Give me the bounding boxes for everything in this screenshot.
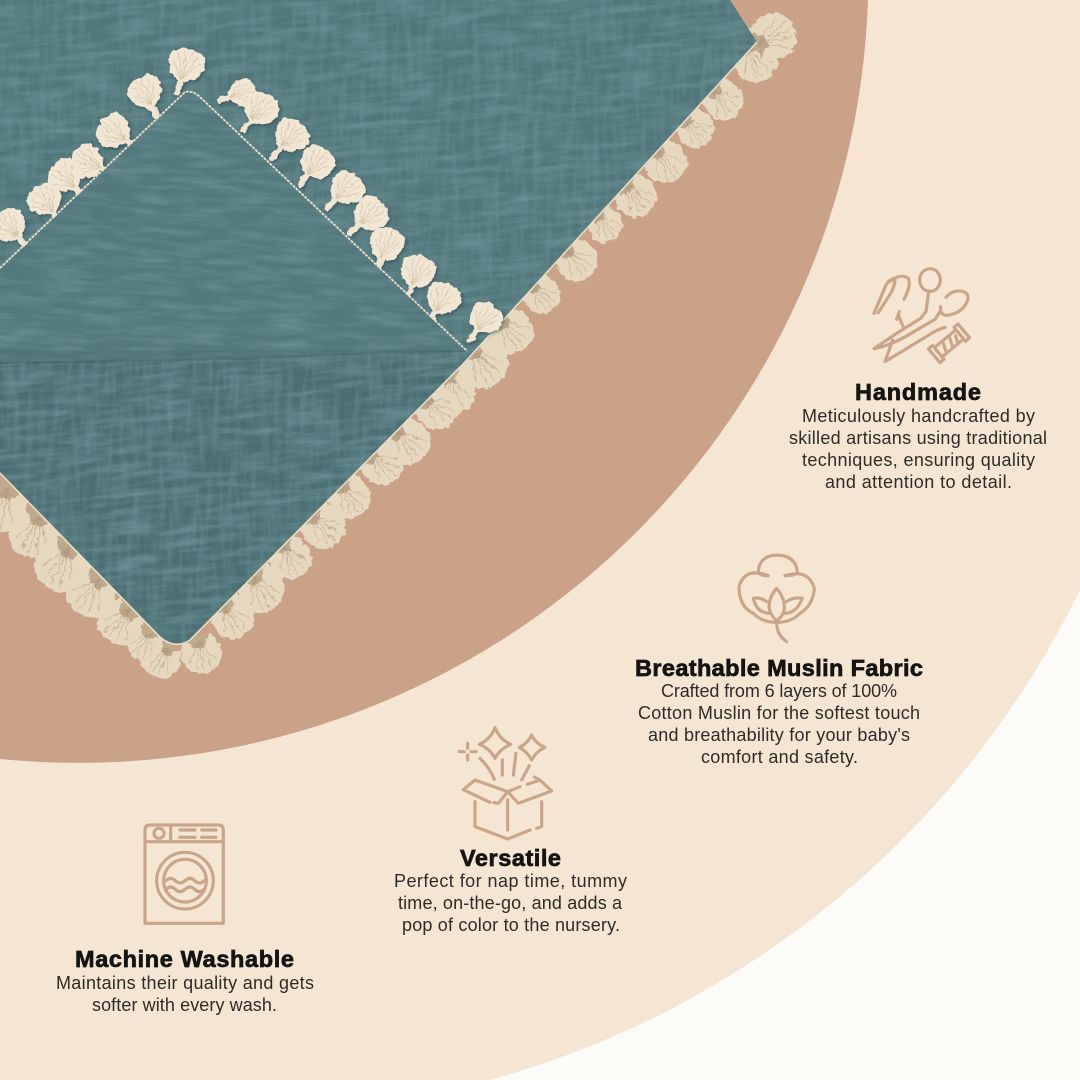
heading: Handmade: Handmade	[855, 379, 981, 405]
blanket folded flap	[0, 92, 463, 362]
text: Versatile description: pop of color to the nursery.	[402, 915, 620, 935]
photo: folded muslin blanket with tassels	[0, 0, 798, 679]
tassels: outer right edge	[136, 32, 785, 685]
text: Handmade description: techniques, ensuring quality	[802, 450, 1035, 470]
blanket back layer	[0, 0, 757, 644]
text: Breathable Muslin Fabric description: and breathability for your baby's	[648, 725, 910, 745]
heading: Versatile: Versatile	[460, 845, 561, 871]
icon: cotton boll	[739, 555, 814, 642]
text: Breathable Muslin Fabric description: Cotton Muslin for the softest touch	[638, 703, 920, 723]
tassels: upper left on back layer	[0, 44, 209, 258]
feature: Breathable Muslin Fabric	[635, 555, 923, 767]
blanket stitched hem	[0, 42, 757, 644]
text: Breathable Muslin Fabric description	[638, 681, 920, 767]
text: Versatile description: time, on-the-go, and adds a	[398, 893, 623, 913]
feature: Versatile	[394, 728, 627, 935]
text: Machine Washable description: softer with every wash.	[92, 995, 277, 1015]
tassel: top corner	[743, 5, 804, 66]
text: Handmade description: skilled artisans using traditional	[789, 428, 1047, 448]
text: Handmade description: and attention to detail.	[825, 472, 1012, 492]
text: Handmade description: Meticulously handcrafted by	[802, 406, 1035, 426]
text: Machine Washable description: Maintains their quality and gets	[56, 973, 314, 993]
text: Handmade description	[789, 406, 1047, 492]
tassels: lower left edge	[0, 474, 167, 667]
text: Versatile description: Perfect for nap time, tummy	[394, 871, 627, 891]
text: Breathable Muslin Fabric description: comfort and safety.	[701, 747, 858, 767]
heading: Breathable Muslin Fabric: Breathable Muslin Fabric	[635, 655, 923, 681]
feature: Handmade	[789, 269, 1047, 492]
text: Versatile description	[394, 871, 627, 935]
icon: scissors, needle and thread	[874, 269, 970, 363]
icon: open box with sparkles	[459, 728, 552, 839]
text: Breathable Muslin Fabric description: Crafted from 6 layers of 100%	[661, 681, 897, 701]
feature: Machine Washable	[56, 825, 314, 1015]
tan circle	[0, 0, 868, 763]
icon: washing machine	[145, 825, 223, 923]
text: Machine Washable description	[56, 973, 314, 1015]
fold shadow	[0, 351, 465, 363]
heading: Machine Washable: Machine Washable	[75, 946, 294, 972]
tassels: upper right on back layer	[216, 75, 508, 350]
flap stitched edge	[0, 92, 467, 351]
